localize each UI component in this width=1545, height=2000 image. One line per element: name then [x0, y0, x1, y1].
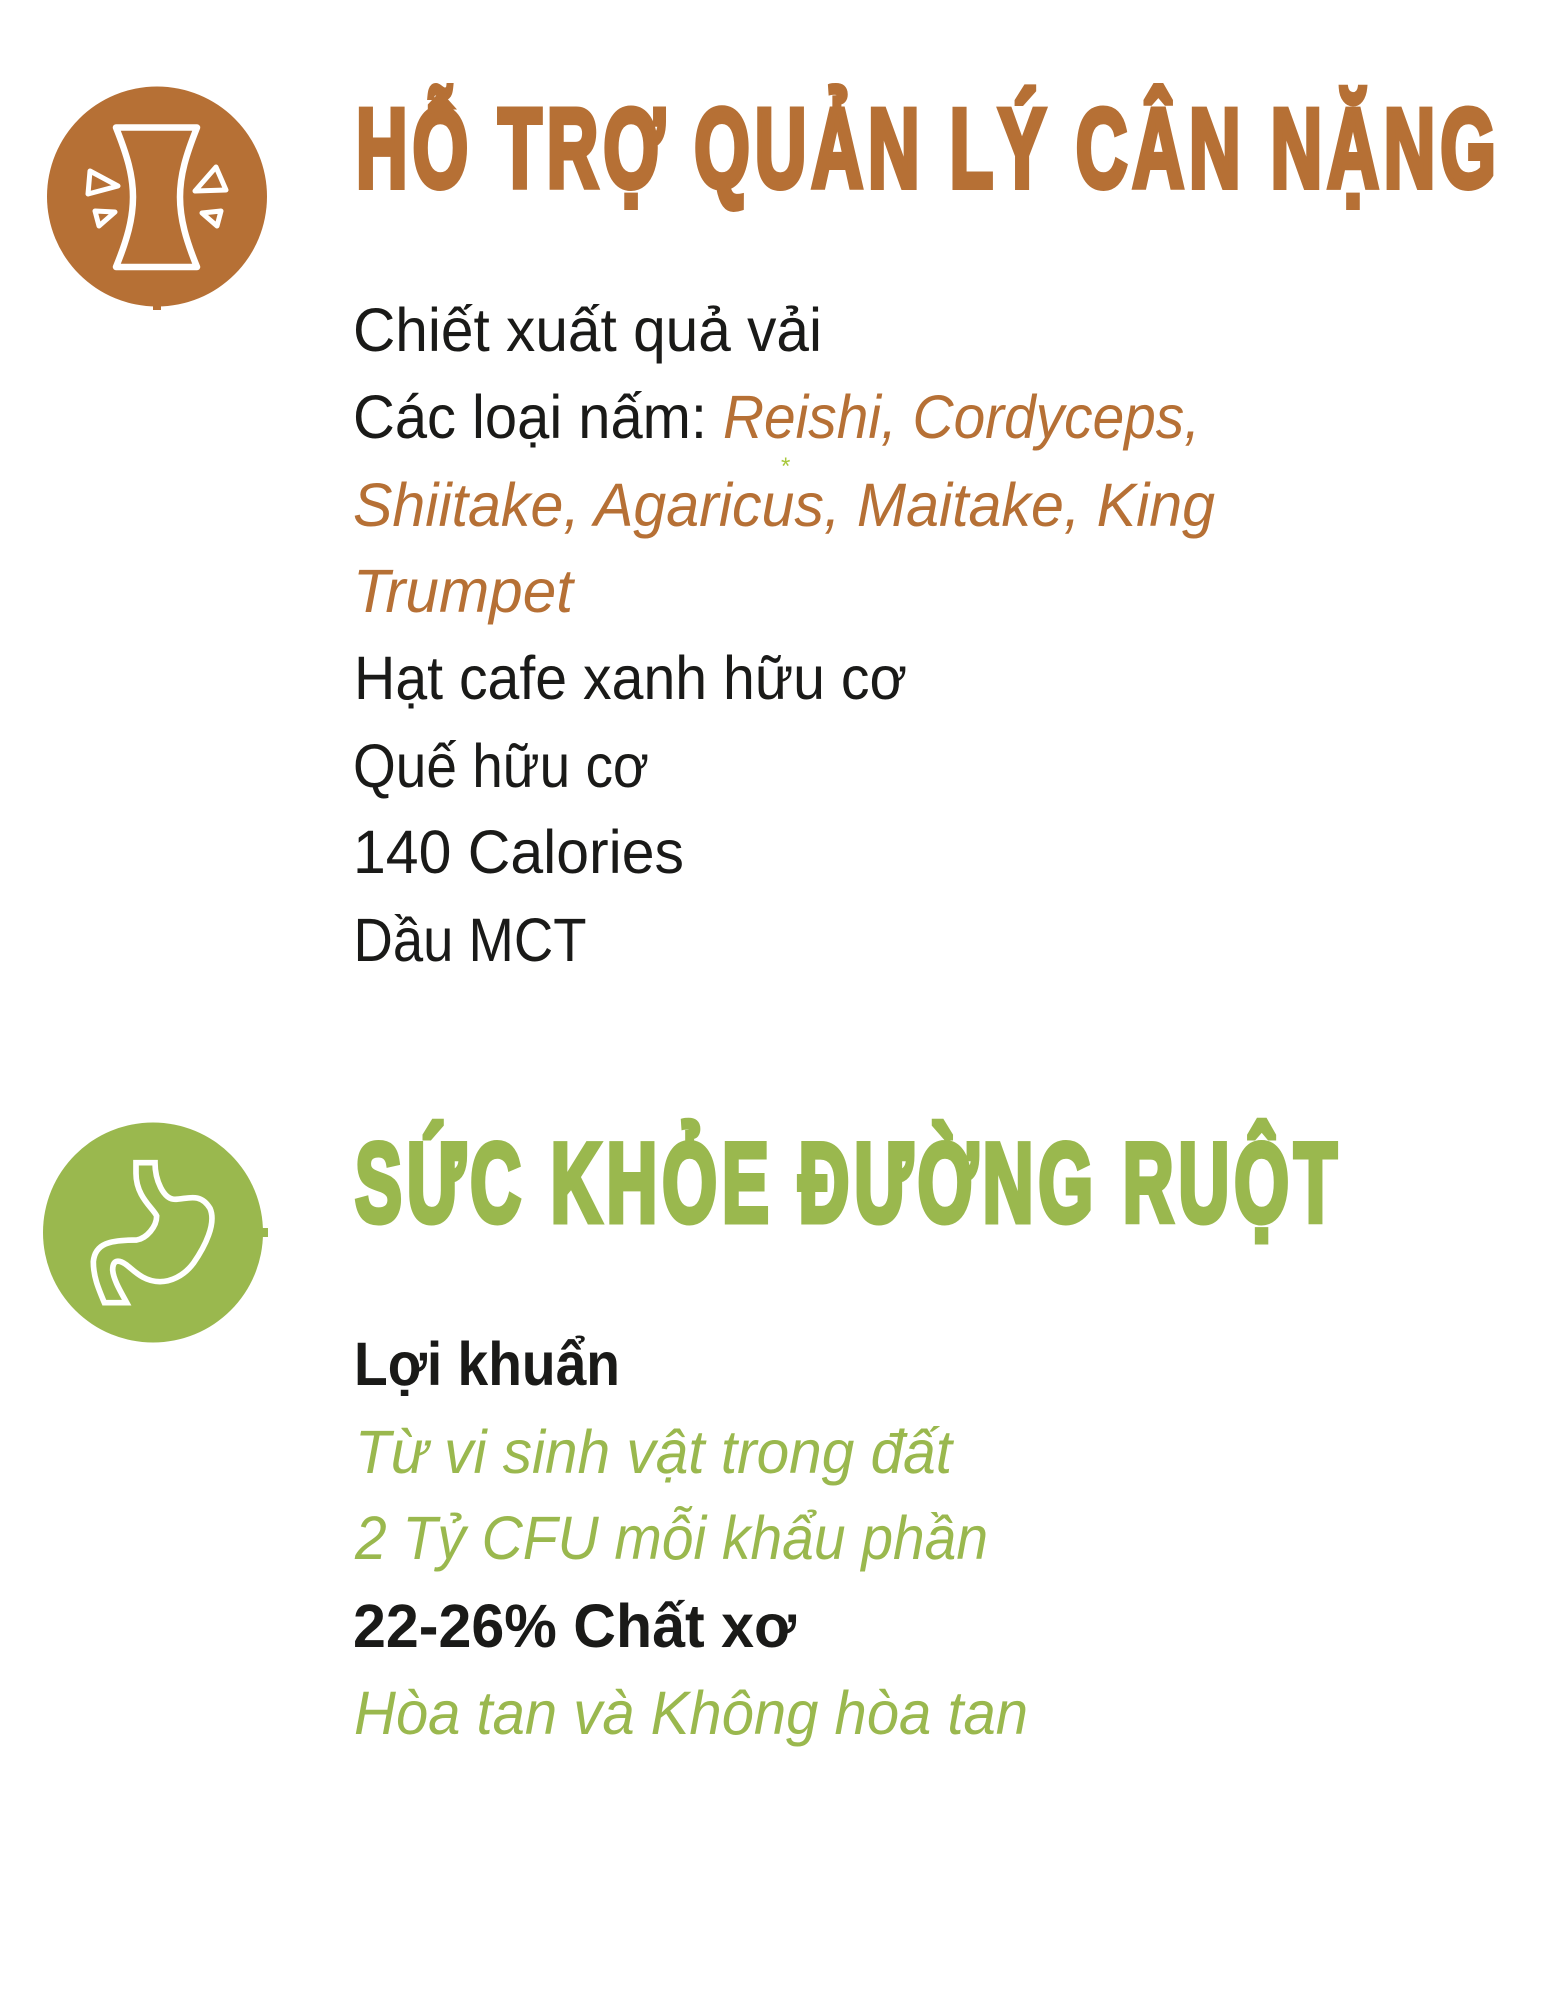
ingredient list: weight management [353, 296, 1215, 974]
panel: gut health [43, 1120, 1342, 1747]
ingredient list: weight management: 140 Calories [353, 818, 684, 886]
ingredient list: gut health: Lợi khuẩn [354, 1330, 620, 1398]
panel: weight management [47, 86, 1501, 974]
ingredient list: gut health [353, 1330, 1028, 1747]
ingredient list: weight management: Shiitake, Agaricus, Maitake, King [353, 471, 1215, 539]
ingredient list: weight management: Dầu MCT [354, 906, 586, 974]
ingredient list: gut health: 2 Tỷ CFU mỗi khẩu phần [354, 1504, 988, 1572]
icon: waist hourglass [47, 86, 267, 310]
asterisk mark: * [781, 453, 790, 480]
ingredient list: weight management: Quế hữu cơ [353, 732, 649, 800]
ingredient list: weight management: Các loại nấm: [353, 383, 707, 451]
ingredient list: weight management: Trumpet [353, 557, 576, 625]
ingredient list: gut health: Từ vi sinh vật trong đất [355, 1418, 955, 1486]
ingredient list: weight management: Chiết xuất quả vải [353, 296, 822, 364]
ingredient list: gut health: Hòa tan và Không hòa tan [354, 1679, 1028, 1747]
icon: stomach [43, 1122, 268, 1342]
ingredient list: weight management: Hạt cafe xanh hữu cơ [354, 644, 907, 712]
ingredient list: weight management: Reishi, Cordyceps, [723, 383, 1200, 451]
ingredient list: gut health: 22-26% Chất xơ [353, 1592, 797, 1660]
